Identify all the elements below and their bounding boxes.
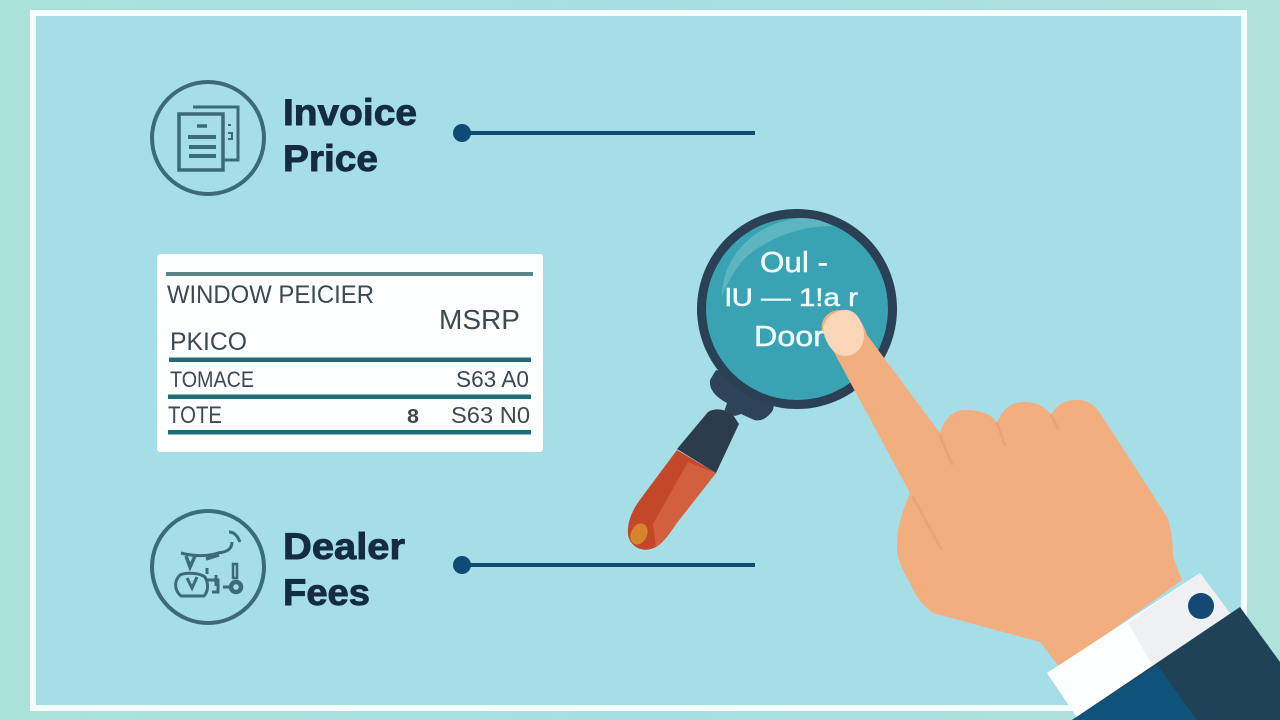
connector line: dealer fees	[453, 556, 755, 574]
invoice price row	[152, 82, 755, 194]
handle highlight	[653, 462, 716, 547]
cufflink	[1188, 593, 1214, 619]
window sticker card	[157, 254, 543, 452]
knuckle creases	[913, 415, 1058, 549]
cuff shaded section	[1128, 573, 1235, 670]
lens text: lU — 1!a r	[725, 284, 858, 312]
sticker text: S63 A0	[456, 366, 529, 392]
icon: magnifying glass	[627, 209, 897, 550]
sticker text: PKICO	[170, 328, 247, 356]
lens text	[725, 247, 858, 353]
heading: invoice price: Price	[283, 138, 378, 179]
handle tip	[630, 524, 648, 544]
lens	[706, 218, 888, 400]
sticker text: WINDOW PEICIER	[167, 281, 374, 309]
lens ring	[697, 209, 897, 409]
heading: invoice price	[283, 92, 417, 179]
sticker text: TOMACE	[170, 367, 254, 392]
lens highlight	[722, 218, 832, 296]
shirt cuff	[1047, 573, 1235, 720]
dealer fees row	[152, 511, 755, 623]
sticker text: TOTE	[168, 402, 222, 429]
neck	[710, 370, 800, 420]
icon: invoice document	[152, 82, 264, 194]
handle grip	[628, 450, 716, 550]
sleeve blue panel	[1072, 665, 1197, 720]
heading: invoice price: Invoice	[283, 92, 417, 133]
heading: dealer fees: Dealer	[283, 526, 405, 567]
lens text: Door	[754, 321, 824, 353]
hand	[822, 310, 1182, 668]
sticker text: 8	[407, 406, 419, 428]
suit sleeve	[1072, 607, 1280, 720]
card background	[157, 254, 543, 452]
heading: dealer fees: Fees	[283, 572, 370, 613]
sticker rule lines	[166, 272, 533, 434]
lens text: Oul -	[760, 247, 828, 279]
connector line: invoice price	[453, 124, 755, 142]
sticker text	[167, 281, 530, 429]
sticker text: MSRP	[439, 304, 520, 335]
handle collar	[677, 409, 739, 473]
fingertip nail	[823, 310, 864, 356]
icon: pointing hand with cuff	[822, 310, 1280, 720]
sticker text: S63 N0	[451, 402, 530, 428]
heading: dealer fees	[283, 526, 405, 613]
icon: dealer fees	[152, 511, 264, 623]
